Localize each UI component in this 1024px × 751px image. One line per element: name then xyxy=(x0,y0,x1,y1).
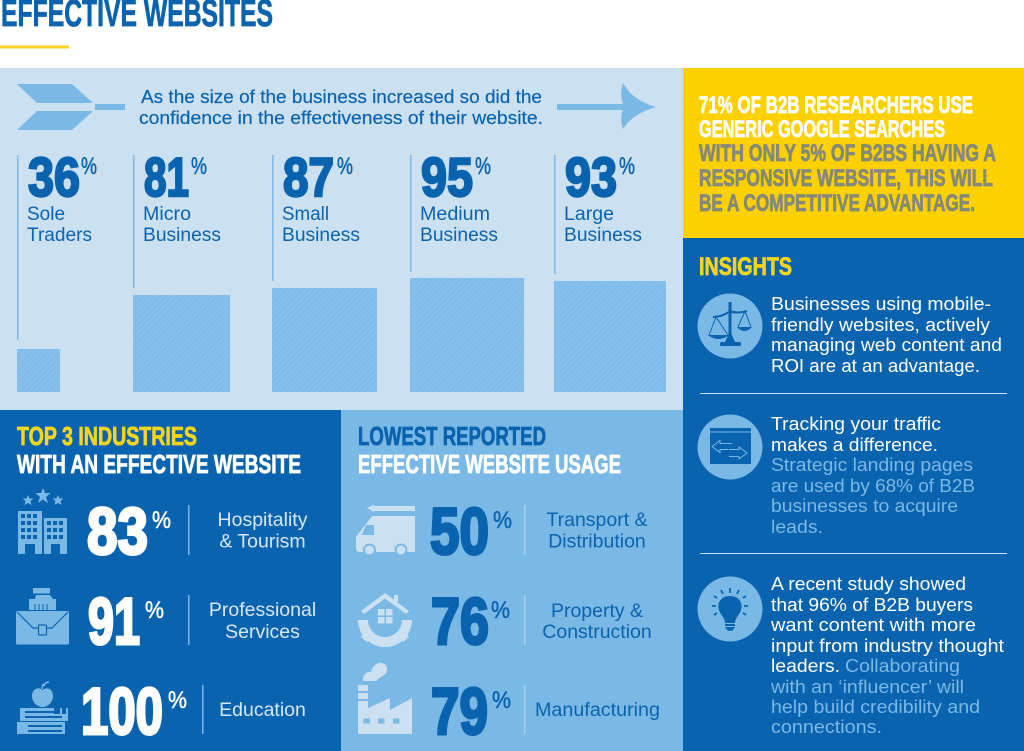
icon: light bulb xyxy=(698,576,762,642)
stat: large business 93%: Large xyxy=(564,204,614,225)
stat: manufacturing 79% xyxy=(431,674,660,748)
heading: lowest reported: EFFECTIVE WEBSITE USAGE xyxy=(358,449,621,479)
stat: hospitality 83%: & Tourism xyxy=(219,530,306,552)
text: thought leaders insight: help build credibility and xyxy=(771,696,980,717)
stat: sole traders 36%: Traders xyxy=(27,225,92,246)
panel: business size confidence xyxy=(0,68,683,410)
text: thought leaders insight: input from industry thought xyxy=(771,635,1004,656)
stat: transport 50%: 50 xyxy=(430,494,489,568)
stat: micro business 81%: 81 xyxy=(144,146,189,208)
text: thought leaders insight: leaders. xyxy=(771,655,840,676)
text: tracking insight: businesses to acquire xyxy=(771,495,958,516)
icon: delivery van xyxy=(356,504,415,556)
stat: manufacturing 79%: Manufacturing xyxy=(535,699,660,721)
stat: medium business 95% xyxy=(410,146,498,272)
stat: professional services 91%: % xyxy=(145,597,164,624)
icon: hotel xyxy=(18,488,67,554)
stat: medium business 95%: % xyxy=(475,153,491,180)
stat: professional services 91%: Services xyxy=(225,621,300,643)
stat: property 76%: 76 xyxy=(431,584,489,658)
text: mobile-friendly insight xyxy=(771,293,1002,376)
stat: sole traders 36%: % xyxy=(81,153,97,180)
stat: sole traders 36%: Sole xyxy=(27,204,65,225)
heading: top 3 industries: WITH AN EFFECTIVE WEBSITE xyxy=(17,449,301,479)
heading: top 3 industries xyxy=(17,421,301,479)
stat: manufacturing 79%: 79 xyxy=(431,674,488,748)
heading: top 3 industries: TOP 3 INDUSTRIES xyxy=(17,421,197,451)
icon: arrow head right xyxy=(557,83,656,129)
stat: large business 93%: 93 xyxy=(565,146,617,208)
text: thought leaders insight xyxy=(770,573,1004,737)
text: tracking insight: makes a difference. xyxy=(771,434,938,455)
intro text: As the size of the business increased so did the xyxy=(141,86,542,107)
text: tracking insight: Tracking your traffic xyxy=(771,413,941,434)
stat: large business 93%: % xyxy=(619,153,635,180)
icon: scales xyxy=(698,294,762,358)
text: thought leaders insight: that 96% of B2B buyers xyxy=(771,594,973,615)
heading: lowest reported xyxy=(358,421,621,479)
stat: property 76% xyxy=(431,584,652,658)
stat: small business 87% xyxy=(272,146,360,281)
stat: large business 93%: Business xyxy=(564,225,642,246)
stat: manufacturing 79%: % xyxy=(492,687,511,714)
text: mobile-friendly insight: Businesses using mobile- xyxy=(771,293,991,314)
text: thought leaders insight: want content with more xyxy=(770,614,976,635)
stat: hospitality 83%: 83 xyxy=(87,494,148,568)
stat: property 76%: % xyxy=(491,597,510,624)
stat: small business 87%: Small xyxy=(282,204,329,225)
stat: medium business 95%: 95 xyxy=(421,146,473,208)
stat: medium business 95%: Business xyxy=(420,225,498,246)
stat: large business 93% xyxy=(554,146,642,274)
stat: professional services 91%: Professional xyxy=(209,599,316,621)
stat: sole traders 36% xyxy=(17,146,97,340)
stat: micro business 81%: Business xyxy=(143,225,221,246)
stat: sole traders 36%: 36 xyxy=(28,146,80,208)
text: tracking insight: leads. xyxy=(771,516,823,537)
stat: education 100%: % xyxy=(168,687,187,714)
stat: medium business 95%: Medium xyxy=(420,204,490,225)
stat: professional services 91%: 91 xyxy=(88,584,140,658)
stat: small business 87%: % xyxy=(337,153,353,180)
stat: transport 50%: Transport & xyxy=(546,509,648,531)
text: thought leaders insight: Collaborating xyxy=(845,655,960,676)
intro text: confidence in the effectiveness of their website. xyxy=(139,107,543,128)
text: tracking insight xyxy=(771,413,975,537)
text: thought leaders insight: connections. xyxy=(771,716,882,737)
intro text xyxy=(139,86,543,128)
text: thought leaders insight: with an ‘influencer’ will xyxy=(770,676,964,697)
text: mobile-friendly insight: managing web content and xyxy=(771,334,1002,355)
stat: transport 50% xyxy=(430,494,648,568)
icon: factory xyxy=(358,663,412,734)
stat: micro business 81% xyxy=(133,146,221,288)
panel: lowest reported xyxy=(341,410,683,751)
stat: small business 87%: 87 xyxy=(283,146,334,208)
icon: browser with arrows xyxy=(698,414,762,480)
icon: briefcase xyxy=(16,588,69,644)
text: tracking insight: are used by 68% of B2B xyxy=(771,475,975,496)
stat: small business 87%: Business xyxy=(282,225,360,246)
text: thought leaders insight: A recent study showed xyxy=(771,573,966,594)
stat: hospitality 83%: % xyxy=(152,507,171,534)
stat: property 76%: Property & xyxy=(551,600,643,622)
text: mobile-friendly insight: friendly websites, actively xyxy=(771,314,991,335)
icon: apple on books xyxy=(17,682,68,734)
stat: hospitality 83%: Hospitality xyxy=(218,509,308,531)
heading: lowest reported: LOWEST REPORTED xyxy=(358,421,546,451)
stat: hospitality 83% xyxy=(87,494,308,568)
panel: insights xyxy=(683,238,1024,751)
stat: transport 50%: Distribution xyxy=(548,530,646,552)
stat: property 76%: Construction xyxy=(542,621,652,643)
panel: yellow callout xyxy=(683,68,1024,238)
text: mobile-friendly insight: ROI are at an advantage. xyxy=(771,355,980,376)
title xyxy=(0,0,273,48)
text: tracking insight: Strategic landing pages xyxy=(771,454,973,475)
icon: house in gear xyxy=(358,593,412,647)
bar chart: confidence squares xyxy=(17,278,666,392)
stat: education 100%: Education xyxy=(219,699,306,721)
stat: micro business 81%: Micro xyxy=(143,204,191,225)
stat: micro business 81%: % xyxy=(191,153,207,180)
stat: professional services 91% xyxy=(88,584,316,658)
stat: education 100% xyxy=(81,674,306,748)
stat: transport 50%: % xyxy=(493,507,512,534)
stat: education 100%: 100 xyxy=(81,674,163,748)
icon: fletching arrow tail xyxy=(17,84,125,130)
heading: insights: INSIGHTS xyxy=(699,253,792,281)
panel: top 3 industries xyxy=(0,410,341,751)
